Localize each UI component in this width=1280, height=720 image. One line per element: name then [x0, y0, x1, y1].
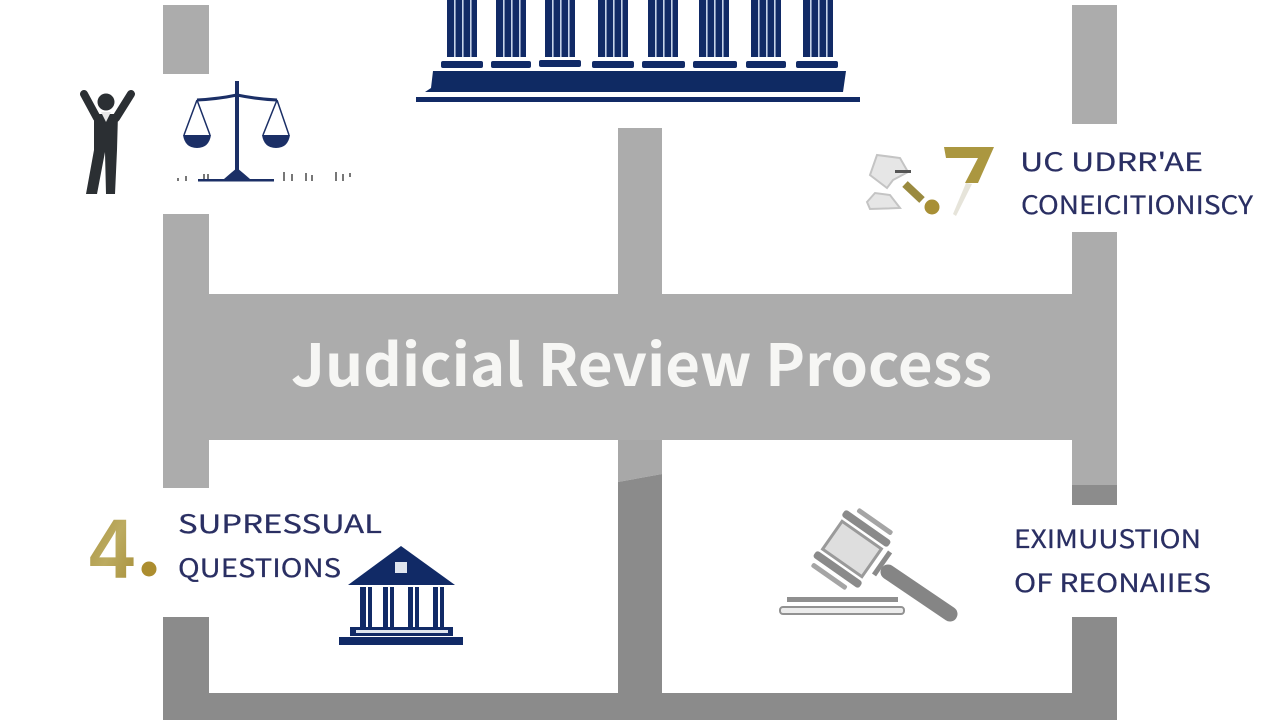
label: top right [1020, 143, 1254, 222]
title: Judicial Review Process [291, 319, 992, 403]
label: bottom left [178, 505, 382, 585]
label: bottom right: EXIMUUSTION [1014, 520, 1201, 556]
icon: person with raised arms [84, 94, 131, 194]
label: bottom right: OF REONAIIES [1014, 564, 1211, 600]
label: bottom left: QUESTIONS [178, 549, 341, 585]
flowchart frame: connecting bars [163, 5, 1117, 720]
label: bottom right [1014, 520, 1211, 600]
icon: faded gavel [867, 155, 940, 214]
item: top right gavel icon and number 7 [867, 147, 994, 216]
icon: gray gavel [780, 502, 950, 614]
number 4: 4 [89, 502, 134, 596]
icon: courthouse columns [416, 0, 860, 102]
number 7 [944, 147, 994, 216]
number 4 [89, 502, 156, 596]
label: bottom left: SUPRESSUAL [178, 505, 382, 541]
label: top right: CONEICITIONISCY [1021, 186, 1254, 222]
icon: small courthouse [339, 546, 463, 645]
icon: scales of justice [178, 81, 350, 182]
label: top right: UC UDRR'AE [1020, 143, 1203, 179]
